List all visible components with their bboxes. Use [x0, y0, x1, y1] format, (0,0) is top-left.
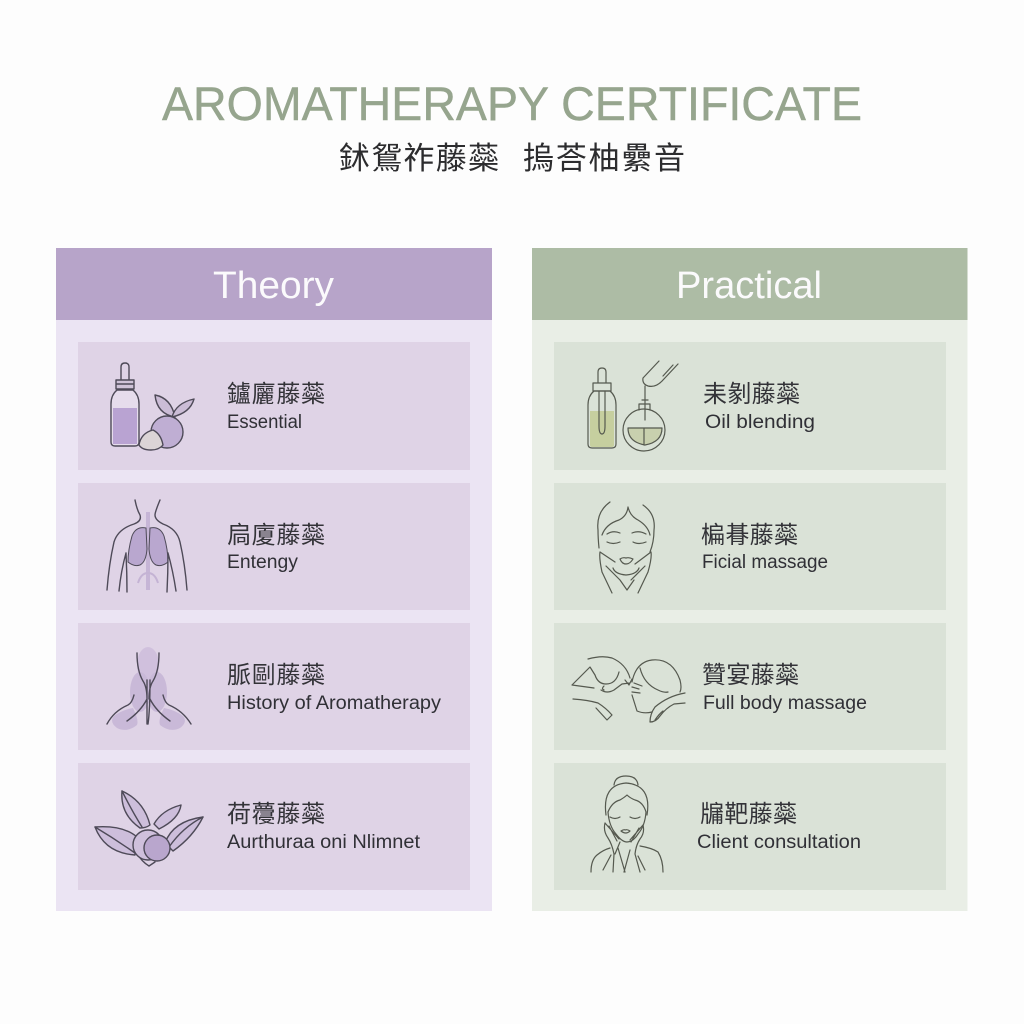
- facial massage label zh: 楄朞藤蘂: [701, 522, 798, 549]
- row: essential: [78, 342, 470, 470]
- essential label zh: 鑪廲藤蘂: [227, 381, 325, 408]
- history label en: History of Aromatherapy: [227, 693, 442, 714]
- row: oil blending: [554, 342, 946, 470]
- practical header bar: [532, 248, 968, 320]
- full body massage label zh: 贊宴藤蘂: [702, 662, 799, 689]
- icon: leaves and berries: [95, 791, 203, 866]
- panel: practical: [532, 248, 968, 911]
- practical heading: Practical: [676, 265, 822, 307]
- theory heading: Theory: [213, 265, 334, 307]
- essential label en: Essential: [227, 412, 302, 433]
- subtitle: 摀荅柚纍音: [523, 141, 685, 176]
- row: client consultation: [554, 763, 946, 890]
- oil blending label en: Oil blending: [705, 412, 815, 433]
- entengy label zh: 扃廈藤蘂: [227, 522, 325, 549]
- row: full body massage: [554, 623, 946, 750]
- full body massage label en: Full body massage: [703, 693, 867, 714]
- icon: dropper bottle and botanicals: [111, 363, 194, 450]
- aurthuraa label zh: 荷蘉藤蘂: [227, 801, 325, 828]
- icon: woman touching face: [591, 776, 663, 872]
- panel: theory: [56, 248, 492, 911]
- client consultation label zh: 牖靶藤蘂: [700, 801, 797, 828]
- client consultation label en: Client consultation: [697, 832, 861, 853]
- entengy label en: Entengy: [227, 552, 298, 573]
- subtitle: [339, 141, 685, 176]
- aurthuraa label en: Aurthuraa oni Nlimnet: [227, 832, 421, 853]
- icon: two heads massage: [572, 657, 685, 722]
- row: history: [78, 623, 470, 750]
- row: entengy: [78, 483, 470, 610]
- subtitle: 鉥鴛祚藤蘂: [339, 141, 499, 176]
- icon: face with hands: [598, 502, 654, 593]
- history label zh: 脈剾藤蘂: [227, 662, 325, 689]
- facial massage label en: Ficial massage: [702, 552, 828, 573]
- row: aurthuraa: [78, 763, 470, 890]
- title: AROMATHERAPY CERTIFICATE: [162, 77, 862, 130]
- icon: botanical form: [107, 647, 191, 730]
- theory header bar: [56, 248, 492, 320]
- icon: torso with lungs: [107, 500, 187, 592]
- row: facial massage: [554, 483, 946, 610]
- oil blending label zh: 耒剶藤蘂: [703, 381, 800, 408]
- icon: bottle, flask and dropper: [588, 361, 678, 451]
